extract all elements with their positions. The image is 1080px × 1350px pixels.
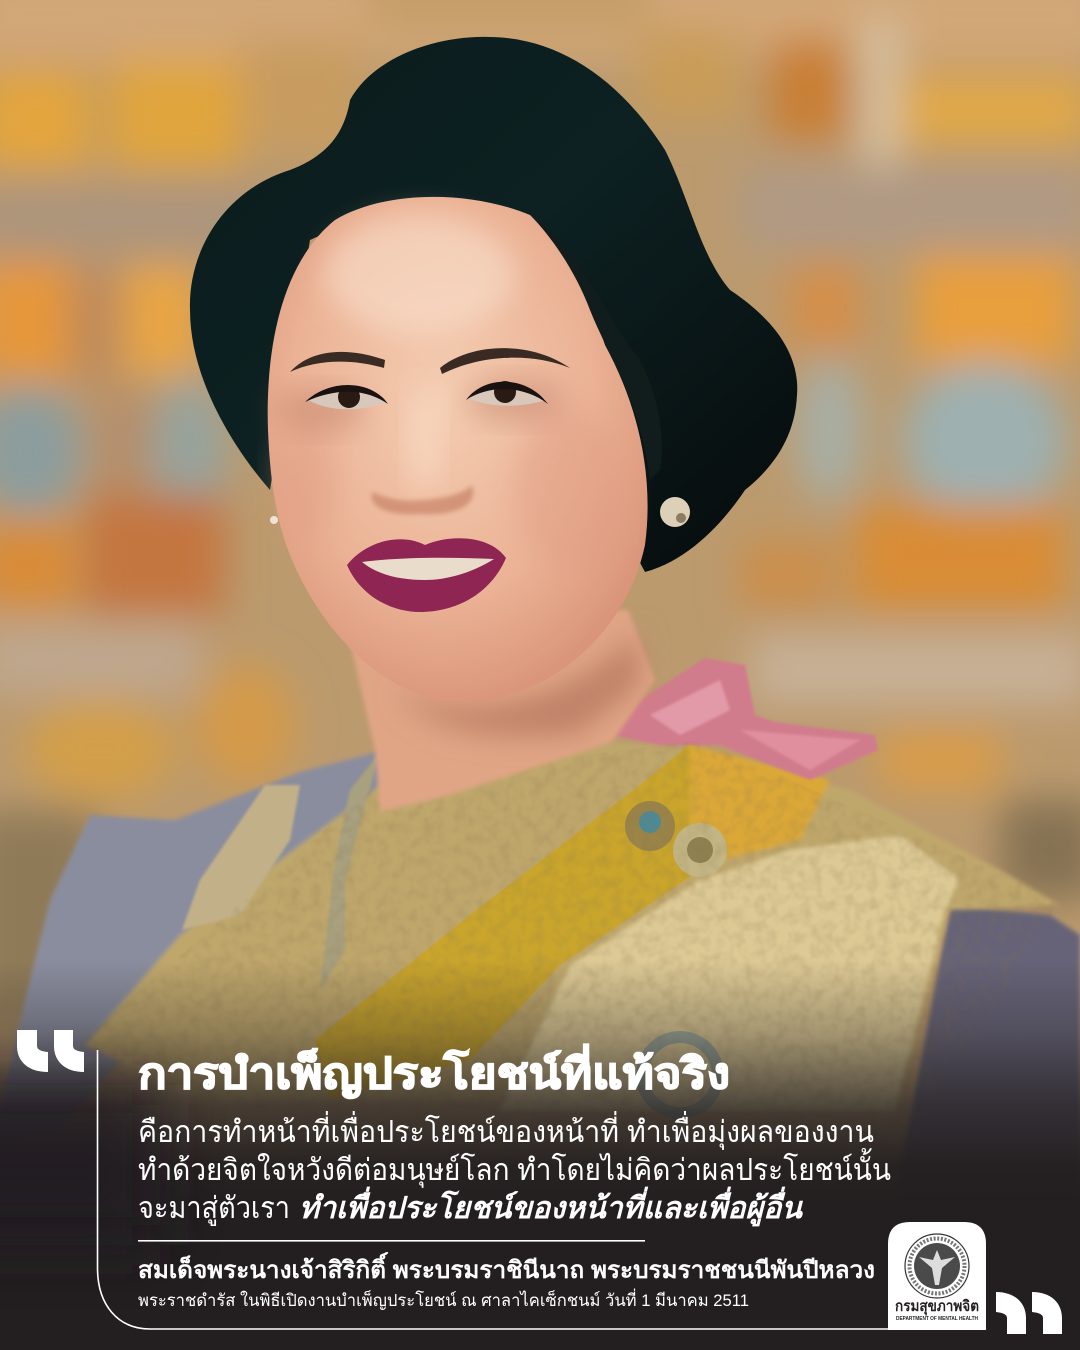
- photo: dress and sash: [0, 658, 1080, 1200]
- logo seal: [905, 1234, 969, 1298]
- right brow: [440, 348, 570, 374]
- quote body: จะมาสู่ตัวเรา: [138, 1192, 290, 1226]
- lips: [347, 538, 506, 612]
- quote body: [138, 1111, 891, 1227]
- photo: face: [268, 197, 662, 702]
- logo: department of mental health: [888, 1222, 986, 1330]
- cheek blush: [515, 410, 625, 570]
- opening quote mark: [17, 1030, 84, 1072]
- logo english name: DEPARTMENT OF MENTAL HEALTH: [896, 1316, 978, 1322]
- quote body: ทำเพื่อประโยชน์ของหน้าที่และเพื่อผู้อื่น: [299, 1186, 804, 1227]
- pin badge: [642, 1037, 718, 1113]
- beaded collar: [182, 752, 380, 990]
- dress right sleeve: [895, 905, 1080, 1200]
- photo: hair: [190, 37, 797, 572]
- dark fade at bottom: [0, 960, 1080, 1202]
- medals: [625, 745, 830, 877]
- quote body: ทำด้วยจิตใจหวังดีต่อมนุษย์โลก ทำโดยไม่คิดว่าผลประโยชน์นั้น: [138, 1148, 891, 1189]
- heading: การบำเพ็ญประโยชน์ที่แท้จริง: [138, 1044, 730, 1099]
- left brow: [290, 352, 385, 372]
- closing quote mark: [996, 1292, 1062, 1334]
- logo thai name: กรมสุขภาพจิต: [895, 1297, 979, 1316]
- gold shawl: [85, 742, 1060, 1100]
- photo: neck: [345, 610, 655, 812]
- attribution name: สมเด็จพระนางเจ้าสิริกิติ์ พระบรมราชินีนาถ พระบรมราชชนนีพันปีหลวง: [138, 1252, 875, 1284]
- dress left sleeve: [0, 750, 400, 1140]
- hair front wisps: [530, 215, 662, 480]
- embroidered band right: [500, 835, 960, 1110]
- sash bow: [612, 658, 878, 780]
- right eye: [466, 381, 548, 406]
- photo: neck shadow: [395, 630, 640, 736]
- nose: [372, 390, 473, 514]
- quote frame line: [98, 1050, 890, 1329]
- left eye: [305, 385, 388, 409]
- embroidery texture: [86, 742, 1020, 1062]
- attribution source: พระราชดำรัส ในพิธีเปิดงานบำเพ็ญประโยชน์ ณ ศาลาไคเซ็กชนม์ วันที่ 1 มีนาคม 2511: [138, 1288, 749, 1310]
- photo: earrings: [270, 497, 690, 527]
- yellow sash: [315, 740, 700, 1100]
- divider: [138, 1240, 645, 1242]
- quote body: คือการทำหน้าที่เพื่อประโยชน์ของหน้าที่ ทำเพื่อมุ่งผลของงาน: [138, 1111, 874, 1151]
